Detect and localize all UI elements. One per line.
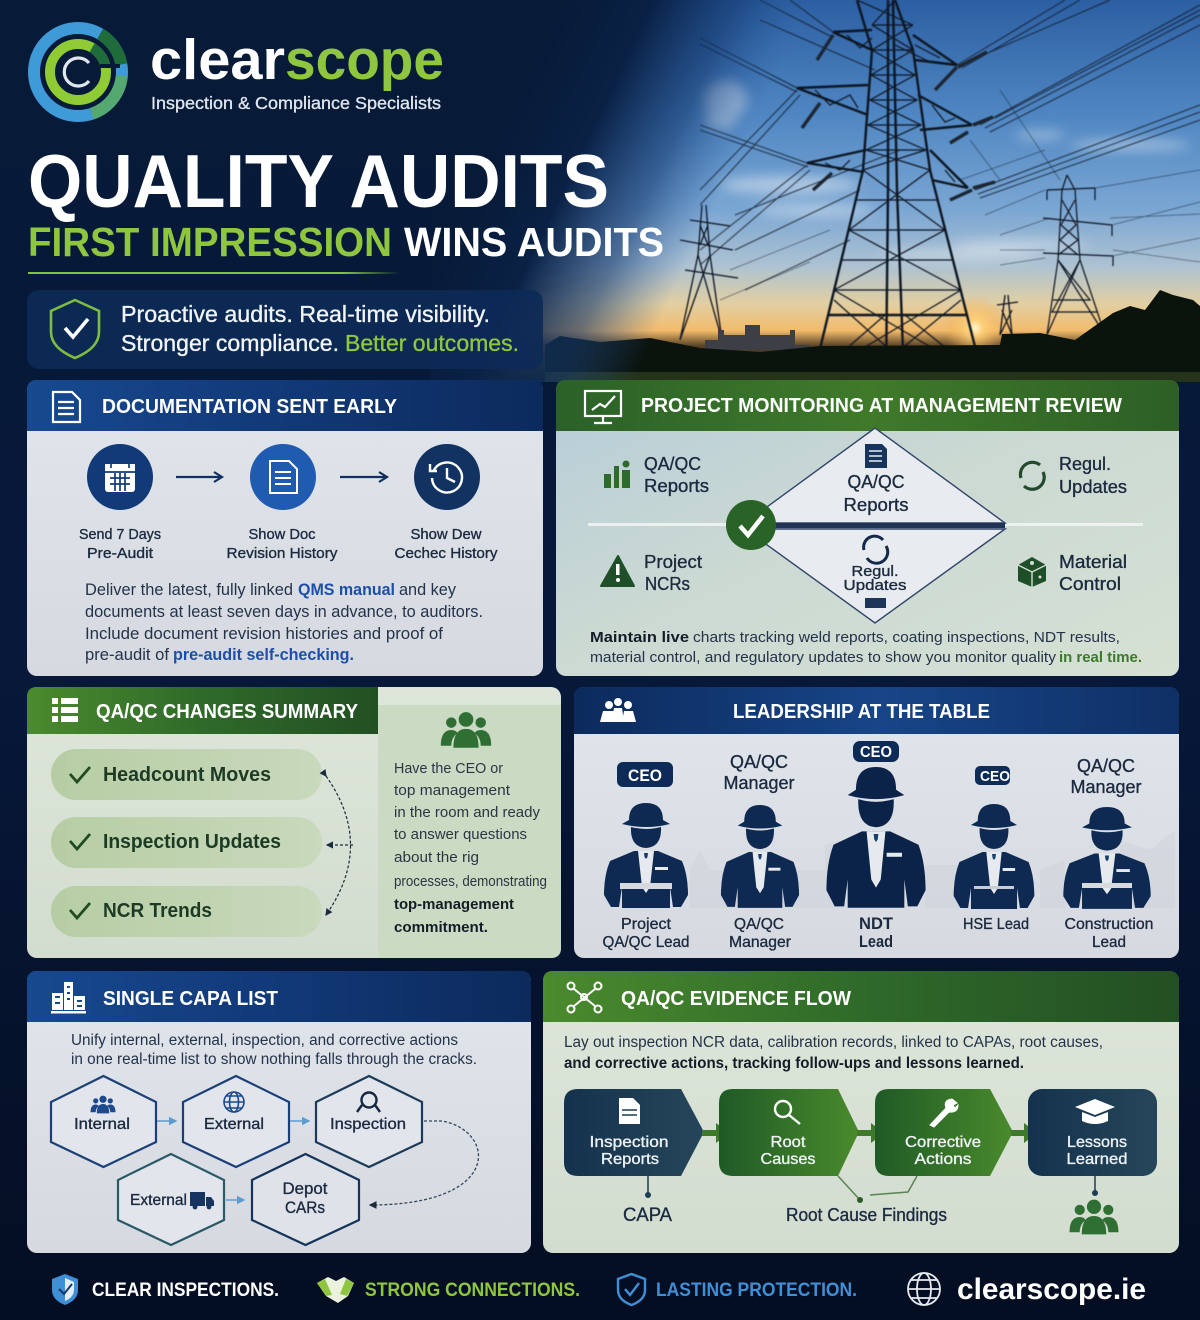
item: QA/QC reports: QA/QC — [644, 454, 701, 474]
logo: clearscope: Inspection & Compliance Specialists — [151, 93, 441, 113]
panel: leadership at the table — [574, 687, 1179, 958]
title: FIRST IMPRESSION — [28, 219, 392, 265]
step: root causes: Root — [770, 1134, 806, 1151]
icon: monitor chart — [585, 391, 621, 423]
hexagon: inspection — [316, 1076, 422, 1167]
person: construction lead: Lead — [1092, 934, 1126, 951]
panel: single CAPA list — [27, 971, 531, 1253]
icon: network nodes — [568, 982, 602, 1012]
diamond: QA/QC reports and regul. updates: Regul. — [852, 563, 898, 580]
side text: in the room and ready — [394, 804, 540, 821]
title — [28, 139, 664, 274]
item: material control — [1018, 552, 1127, 594]
panel: project monitoring at management review: PROJECT MONITORING AT MANAGEMENT REVIEW — [641, 394, 1123, 417]
footer item: website: clearscope.ie — [957, 1273, 1146, 1306]
step: inspection reports: Inspection — [590, 1134, 668, 1151]
description text: QMS manual — [298, 581, 395, 599]
connector and label: CAPA — [623, 1176, 672, 1226]
side text: top management — [394, 782, 511, 799]
callout: proactive audits: Better outcomes. — [345, 330, 519, 356]
step: root causes: Causes — [760, 1151, 816, 1168]
panel: single CAPA list: Unify internal, external, inspection, and corrective actions — [71, 1032, 458, 1049]
icon: green check circle — [726, 500, 776, 550]
item: project NCRs: Project — [644, 552, 702, 572]
pill: headcount moves: Headcount Moves — [103, 764, 271, 786]
hexagon: external — [183, 1076, 289, 1167]
icon: list — [52, 698, 78, 722]
description text: material control, and regulatory updates to show you monitor quality — [590, 649, 1057, 666]
item: regulatory updates: Regul. — [1059, 454, 1111, 474]
arrow — [290, 1120, 309, 1122]
faint skyline — [690, 830, 1175, 908]
description text: charts tracking weld reports, coating inspections, NDT results, — [693, 629, 1120, 646]
icon: buildings — [51, 982, 86, 1014]
connector and icon: team — [1070, 1176, 1118, 1234]
insulators — [802, 35, 995, 200]
panel: QA/QC evidence flow: Lay out inspection NCR data, calibration records, linked to CAPAs, root causes, — [564, 1034, 1103, 1051]
person: project QA/QC lead: QA/QC Lead — [602, 934, 690, 951]
person: HSE lead: HSE Lead — [963, 916, 1029, 933]
divider — [588, 523, 1143, 526]
connectors and label: root cause findings — [786, 1176, 947, 1225]
left tower — [680, 205, 1018, 340]
footer item: clear inspections — [52, 1274, 279, 1305]
diamond: QA/QC reports and regul. updates: QA/QC — [848, 472, 904, 492]
arrow — [157, 1120, 176, 1122]
dashed flow arrows — [326, 776, 353, 915]
description text: documents at least seven days in advance, to auditors. — [85, 603, 483, 621]
side text: top-management — [394, 896, 514, 913]
side text: Have the CEO or — [394, 760, 503, 777]
panel: documentation sent early: DOCUMENTATION SENT EARLY — [102, 396, 398, 418]
item: project NCRs: NCRs — [645, 574, 690, 594]
step: show doc: Revision History — [226, 545, 338, 562]
person: project QA/QC lead: Project — [621, 916, 672, 933]
step: lessons learned: Learned — [1066, 1151, 1128, 1168]
item: material control: Material — [1059, 552, 1127, 572]
arrow — [340, 472, 387, 482]
panel: leadership at the table: LEADERSHIP AT THE TABLE — [733, 701, 990, 723]
panel: documentation sent early — [27, 380, 543, 676]
arrow — [226, 1199, 244, 1201]
footer item: strong connections — [317, 1277, 580, 1303]
item: regulatory updates — [1020, 454, 1127, 497]
connector and label: CAPA: CAPA — [623, 1205, 672, 1226]
hexagon: depot CARs: Depot — [282, 1179, 328, 1198]
hexagon: internal: Internal — [74, 1116, 130, 1133]
step: send 7 days — [79, 444, 161, 562]
person: NDT lead: Lead — [859, 933, 893, 951]
icon: shield check — [51, 300, 99, 358]
description text: pre-audit self-checking. — [173, 646, 354, 664]
item: QA/QC reports — [604, 454, 709, 496]
panel: QA/QC changes summary: QA/QC CHANGES SUMMARY — [96, 701, 359, 723]
description text: Maintain live — [590, 629, 689, 646]
right tower — [1043, 175, 1113, 335]
panel: QA/QC evidence flow: and corrective actions, tracking follow-ups and lessons learned. — [564, 1055, 1024, 1072]
step: inspection reports: Reports — [601, 1151, 659, 1168]
person: construction lead: QA/QC — [1077, 756, 1135, 776]
treeline and skyline — [545, 290, 1200, 382]
dashed return arrow — [370, 1121, 478, 1205]
icon: document — [53, 392, 80, 422]
description text: Deliver the latest, fully linked — [85, 581, 293, 599]
arrow — [176, 472, 222, 482]
person: QA/QC manager: Manager — [724, 773, 795, 793]
person: construction lead: Construction — [1064, 916, 1154, 933]
side text — [394, 760, 547, 936]
person: project QA/QC lead: CEO — [628, 766, 662, 785]
footer item: lasting protection — [618, 1274, 857, 1305]
panel: QA/QC changes summary — [27, 687, 561, 958]
side text: commitment. — [394, 919, 488, 936]
panel: single CAPA list: SINGLE CAPA LIST — [103, 988, 278, 1010]
wires — [700, 0, 1200, 290]
item: material control: Control — [1059, 574, 1121, 594]
footer item: clear inspections: CLEAR INSPECTIONS. — [92, 1280, 279, 1301]
hexagon: external truck — [118, 1154, 224, 1245]
diamond: QA/QC reports and regul. updates: Updates — [844, 577, 906, 594]
footer item: lasting protection: LASTING PROTECTION. — [656, 1280, 857, 1301]
hexagon: internal — [51, 1076, 156, 1167]
footer — [52, 1273, 1146, 1306]
panel: project monitoring at management review — [556, 380, 1179, 676]
person: QA/QC manager: Manager — [729, 934, 792, 951]
item: QA/QC reports: Reports — [644, 476, 709, 496]
step: send 7 days: Pre-Audit — [87, 545, 154, 562]
panel: single CAPA list: in one real-time list to show nothing falls through the cracks. — [71, 1051, 477, 1068]
arrow — [702, 1123, 729, 1143]
callout: proactive audits: Stronger compliance. — [121, 330, 339, 356]
item: regulatory updates: Updates — [1059, 477, 1127, 497]
footer item: strong connections: STRONG CONNECTIONS. — [365, 1280, 580, 1301]
item: project NCRs — [601, 552, 702, 594]
panel: QA/QC evidence flow — [543, 971, 1179, 1253]
person: HSE lead — [954, 766, 1034, 933]
description text: Include document revision histories and proof of — [85, 625, 443, 643]
step: lessons learned — [1028, 1089, 1157, 1176]
person: NDT lead: CEO — [860, 744, 892, 761]
icon: people — [441, 712, 491, 748]
title: WINS AUDITS — [404, 219, 664, 265]
step: corrective actions: Actions — [914, 1151, 972, 1168]
side text: about the rig — [394, 849, 479, 866]
person: QA/QC manager — [721, 752, 799, 951]
person: construction lead: Manager — [1070, 777, 1142, 797]
arrow — [857, 1123, 884, 1143]
step: show dew: Cechec History — [394, 545, 498, 562]
hexagon: inspection: Inspection — [330, 1116, 406, 1133]
pill: NCR trends — [51, 886, 322, 937]
diamond: QA/QC reports and regul. updates: Reports — [844, 495, 908, 515]
person: QA/QC manager: QA/QC — [730, 752, 788, 772]
step: corrective actions: Corrective — [905, 1134, 981, 1151]
side text: processes, demonstrating — [394, 873, 547, 890]
person: NDT lead — [826, 741, 926, 951]
step: inspection reports — [564, 1089, 704, 1176]
connectors and label: root cause findings: Root Cause Findings — [786, 1205, 947, 1225]
background photo: power transmission towers at sunset — [430, 0, 1200, 382]
description text: in real time. — [1059, 649, 1142, 666]
step: send 7 days: Send 7 Days — [79, 526, 161, 543]
step: show doc — [226, 444, 338, 562]
description text — [590, 629, 1142, 666]
step: corrective actions — [875, 1089, 1013, 1176]
panel: QA/QC evidence flow: QA/QC EVIDENCE FLOW — [621, 988, 851, 1010]
diamond: QA/QC reports and regul. updates — [745, 428, 1005, 623]
logo: clearscope: clear — [150, 28, 285, 92]
icon: team — [600, 698, 636, 722]
logo: clearscope: scope — [285, 28, 444, 92]
description text: pre-audit of — [85, 646, 169, 664]
person: QA/QC manager: QA/QC — [734, 916, 784, 933]
callout: proactive audits — [27, 290, 543, 369]
pill: NCR trends: NCR Trends — [103, 900, 212, 922]
side text: to answer questions — [394, 826, 527, 843]
pill: inspection updates: Inspection Updates — [103, 831, 281, 853]
pill: inspection updates — [51, 817, 322, 868]
step: show doc: Show Doc — [248, 526, 316, 543]
main tower — [797, 0, 983, 378]
callout: proactive audits: Proactive audits. Real-time visibility. — [121, 301, 490, 327]
title: QUALITY AUDITS — [28, 139, 609, 223]
hexagon: external: External — [204, 1116, 264, 1133]
step: show dew — [394, 444, 498, 562]
side column — [378, 705, 561, 958]
hexagon: external truck: External — [130, 1192, 187, 1209]
description text — [85, 581, 483, 664]
step: show dew: Show Dew — [410, 526, 482, 543]
person: NDT lead: NDT — [859, 915, 893, 933]
description text: and key — [399, 581, 457, 599]
step: root causes — [719, 1089, 859, 1176]
hexagon: depot CARs: CARs — [285, 1198, 325, 1217]
arrow — [1011, 1123, 1037, 1143]
pill: headcount moves — [51, 749, 322, 800]
person: construction lead — [1063, 756, 1154, 951]
logo: clearscope — [34, 28, 444, 116]
person: project QA/QC lead — [602, 762, 690, 951]
step: lessons learned: Lessons — [1067, 1134, 1127, 1151]
hexagon: depot CARs — [252, 1154, 359, 1245]
person: HSE lead: CEO — [980, 768, 1010, 785]
